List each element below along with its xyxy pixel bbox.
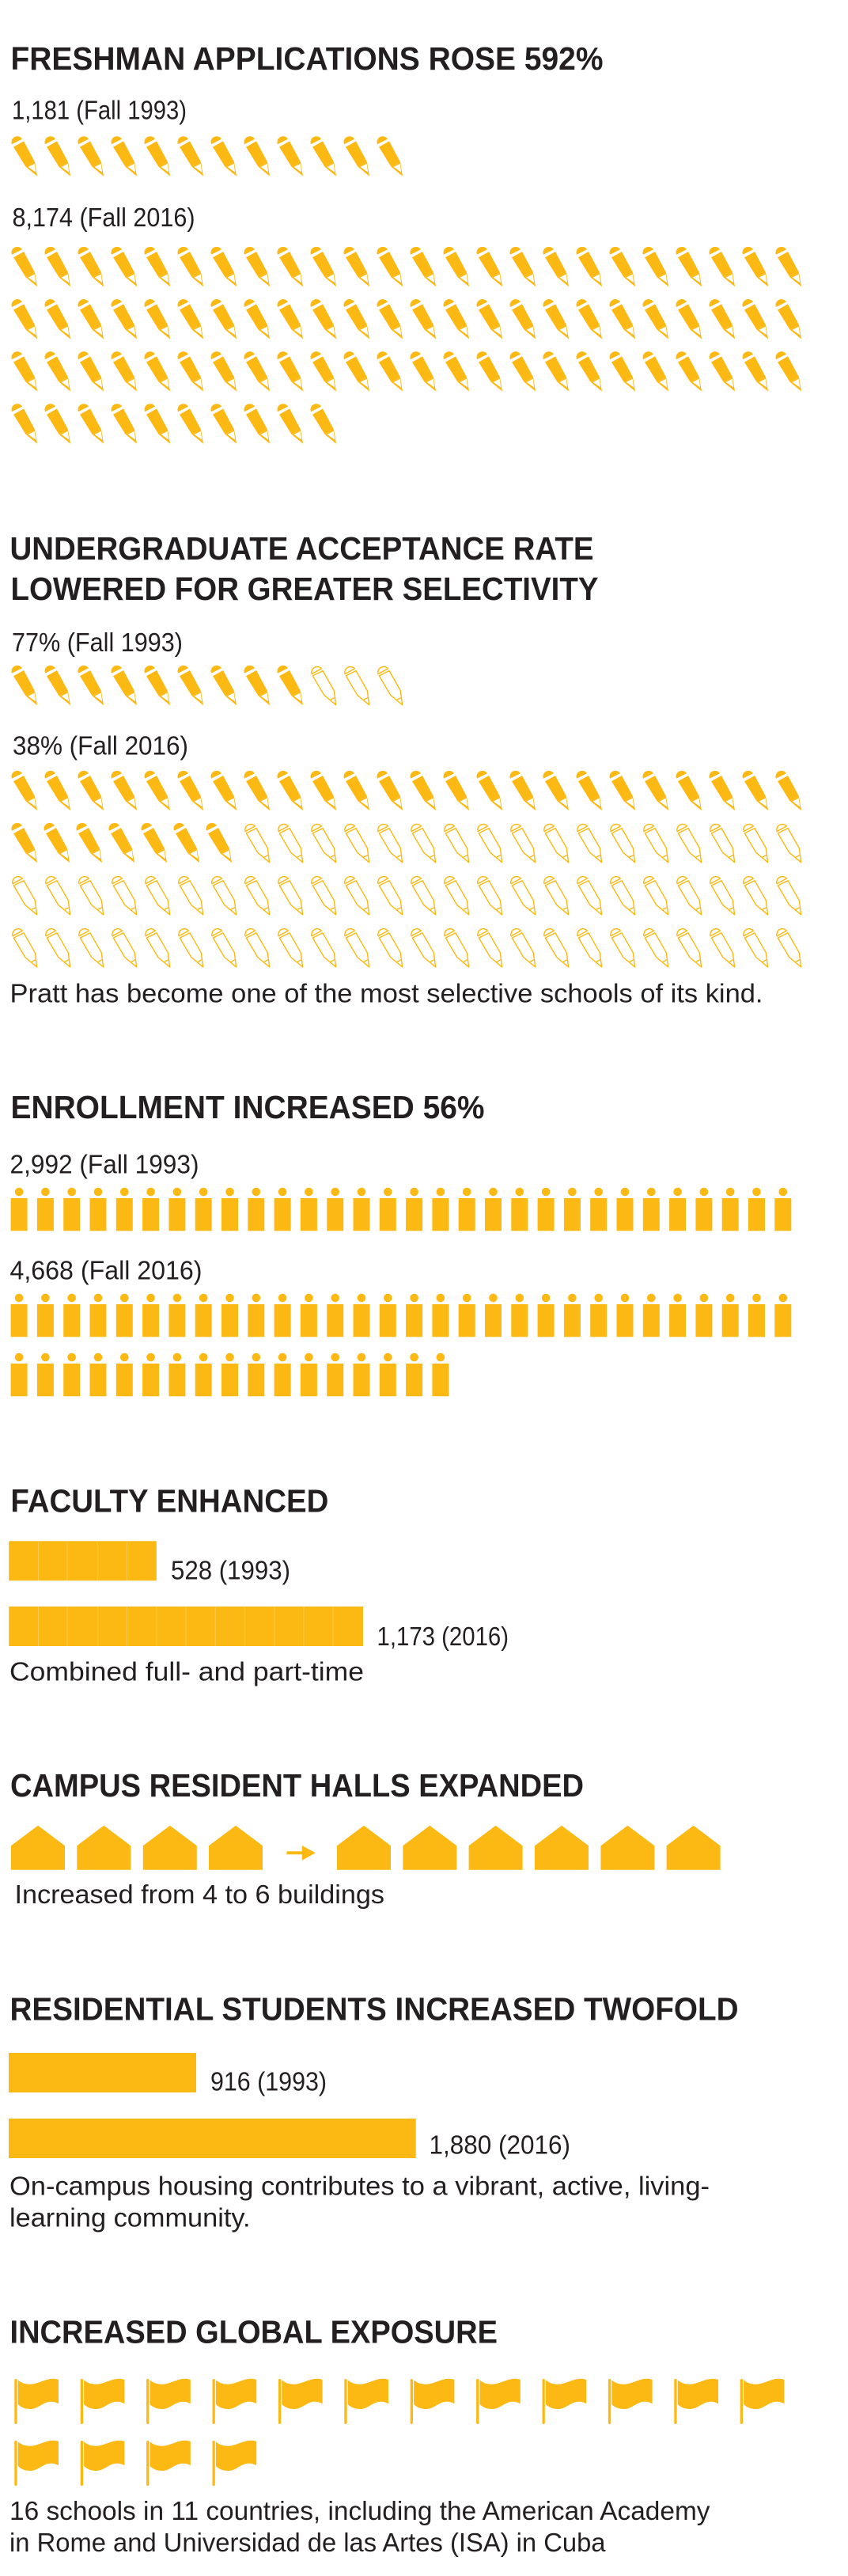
- people row: 1993: [11, 1188, 791, 1231]
- note: on-campus housing: [9, 2171, 710, 2232]
- note: on-campus housing: learning community.: [9, 2202, 250, 2232]
- people rows: 2016: [11, 1294, 791, 1396]
- panel: freshman applications: [11, 40, 801, 444]
- pencil rows: 38 percent: [12, 771, 801, 967]
- heading: faculty: FACULTY ENHANCED: [10, 1483, 328, 1519]
- label: 1,173 2016: 1,173 (2016): [377, 1622, 509, 1651]
- heading: freshman applications: FRESHMAN APPLICATIONS ROSE 592%: [11, 40, 603, 77]
- bar: 1993 faculty: [9, 1541, 157, 1580]
- icons: four houses: [11, 1826, 263, 1870]
- panel: global exposure: [9, 2314, 784, 2557]
- bar: 2016 faculty: [9, 1607, 363, 1646]
- heading: global exposure: INCREASED GLOBAL EXPOSURE: [9, 2314, 498, 2350]
- arrow: [286, 1846, 316, 1861]
- label: 1,880 2016: 1,880 (2016): [429, 2130, 570, 2160]
- bar: 1993 residents: [9, 2053, 196, 2092]
- label: 1,181 fall 1993: 1,181 (Fall 1993): [12, 96, 187, 125]
- label: 528 1993: 528 (1993): [171, 1556, 290, 1585]
- label: 77 percent fall 1993: 77% (Fall 1993): [12, 628, 183, 657]
- panel: acceptance rate: [9, 530, 801, 1008]
- heading: residential students: RESIDENTIAL STUDENTS INCREASED TWOFOLD: [9, 1990, 739, 2027]
- pencil row: 1993: [12, 136, 403, 176]
- panel: faculty: [9, 1483, 509, 1686]
- pencil row: 77 percent: [12, 666, 403, 705]
- heading: resident halls: CAMPUS RESIDENT HALLS EXPANDED: [10, 1767, 584, 1804]
- icons: flags row one: [14, 2379, 784, 2424]
- heading: acceptance rate: [9, 530, 598, 607]
- pencil rows: 2016: [12, 247, 801, 444]
- label: 4,668 fall 2016: 4,668 (Fall 2016): [9, 1256, 203, 1285]
- heading: acceptance rate: LOWERED FOR GREATER SELECTIVITY: [11, 571, 598, 607]
- panel: enrollment: [9, 1089, 791, 1396]
- bar: 2016 residents: [9, 2119, 416, 2158]
- note: sixteen schools: in Rome and Universidad de las Artes (ISA) in Cuba: [9, 2528, 606, 2557]
- label: 38 percent fall 2016: 38% (Fall 2016): [13, 730, 188, 760]
- note: increased buildings: Increased from 4 to 6 buildings: [14, 1880, 384, 1909]
- note: sixteen schools: 16 schools in 11 countries, including the American Academy: [9, 2496, 710, 2525]
- icons: six houses: [337, 1826, 721, 1870]
- label: 8,174 fall 2016: 8,174 (Fall 2016): [13, 203, 195, 232]
- note: sixteen schools: [9, 2496, 710, 2557]
- label: 916 1993: 916 (1993): [210, 2067, 327, 2096]
- heading: enrollment: ENROLLMENT INCREASED 56%: [11, 1089, 484, 1125]
- icons: flags row two: [14, 2441, 256, 2486]
- panel: resident halls: [10, 1767, 721, 1909]
- heading: acceptance rate: UNDERGRADUATE ACCEPTANCE RATE: [9, 530, 593, 567]
- label: 2,992 fall 1993: 2,992 (Fall 1993): [9, 1150, 199, 1179]
- note: selective schools: Pratt has become one of the most selective schools of its kind.: [9, 979, 763, 1008]
- note: on-campus housing: On-campus housing contributes to a vibrant, active, living-: [9, 2171, 710, 2200]
- panel: residential students: [9, 1990, 739, 2232]
- note: combined: Combined full- and part-time: [9, 1656, 364, 1686]
